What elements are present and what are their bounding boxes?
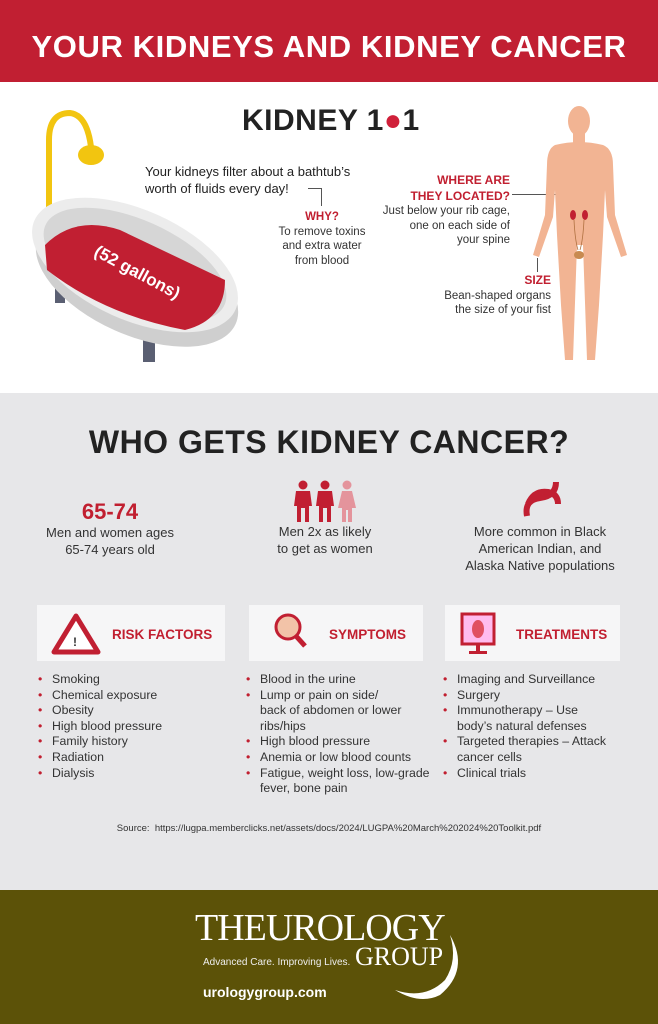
text: where located: WHERE ARE	[437, 173, 510, 187]
list: symptoms: High blood pressure	[260, 734, 370, 748]
stat: populations: More common in Black	[474, 524, 606, 539]
stat: age: Men and women ages	[46, 525, 174, 540]
icon: bathtub	[32, 110, 238, 362]
text: where located: your spine	[457, 234, 510, 246]
icon: magnifier	[274, 614, 307, 648]
footer: Advanced Care. Improving Lives.	[203, 957, 350, 968]
text: bathtub fact: worth of fluids every day!	[145, 181, 289, 196]
title: YOUR KIDNEYS AND KIDNEY CANCER	[31, 29, 626, 64]
list: treatments: Surgery	[457, 688, 500, 702]
text: why: WHY?	[305, 211, 339, 223]
icon: dna	[524, 482, 561, 516]
logo: THEUROLOGY	[195, 907, 445, 949]
text: bathtub fact: Your kidneys filter about a bathtub’s	[145, 164, 350, 179]
stat: populations	[465, 524, 615, 573]
list: symptoms	[246, 672, 430, 795]
panel: treatments	[445, 605, 620, 661]
website: urologygroup.com	[203, 984, 327, 1000]
text: size: the size of your fist	[455, 304, 551, 316]
panel: symptoms	[249, 605, 423, 661]
text: bathtub fact	[145, 164, 350, 196]
icon: warning	[52, 614, 100, 654]
source: Source: https://lugpa.memberclicks.net/assets/docs/2024/LUGPA%20March%202024%20Toolkit.pdf	[117, 823, 541, 834]
kidney 101 heading: KIDNEY 1●1	[242, 104, 420, 137]
text: why: To remove toxins	[279, 226, 365, 238]
list: risk factors: Chemical exposure	[52, 688, 157, 702]
list: treatments: Immunotherapy – Use	[457, 703, 578, 717]
stat: men: Men 2x as likely	[279, 524, 371, 539]
panel: risk factors	[37, 605, 225, 661]
gray section	[0, 393, 658, 890]
stat: age: 65-74 years old	[65, 542, 155, 557]
stat: populations: Alaska Native populations	[465, 558, 615, 573]
text: why: and extra water	[282, 240, 362, 252]
list: symptoms: Lump or pain on side/	[260, 688, 378, 702]
text: size: Bean-shaped organs	[444, 290, 551, 302]
stat: populations: American Indian, and	[479, 541, 601, 556]
stat: age	[46, 499, 174, 557]
list: risk factors: Smoking	[52, 672, 100, 686]
text: why: from blood	[295, 254, 349, 266]
icon: human body	[533, 106, 627, 360]
list: risk factors	[38, 672, 162, 780]
list: symptoms: Anemia or low blood counts	[260, 750, 411, 764]
list: risk factors: High blood pressure	[52, 719, 162, 733]
text: size	[444, 273, 551, 316]
icon: people	[294, 480, 356, 522]
list: risk factors: Family history	[52, 734, 128, 748]
header band	[0, 0, 658, 82]
text: why	[278, 211, 366, 266]
icon: warning: !	[73, 635, 77, 649]
list: treatments: Imaging and Surveillance	[457, 672, 595, 686]
list: treatments: Targeted therapies – Attack cancer cells	[457, 734, 606, 764]
text: where located: one on each side of	[410, 220, 510, 232]
footer: GROUP	[355, 942, 443, 971]
list: symptoms: back of abdomen or lower ribs/hips	[260, 703, 402, 733]
list: treatments	[444, 672, 606, 780]
footer	[0, 890, 658, 1024]
list: treatments: body’s natural defenses	[457, 719, 587, 733]
panel: treatments: TREATMENTS	[516, 627, 607, 642]
heading: who gets kidney cancer: WHO GETS KIDNEY CANCER?	[89, 424, 569, 460]
list: symptoms: Blood in the urine	[260, 672, 356, 686]
text: where located	[383, 173, 510, 246]
text: where located: Just below your rib cage,	[383, 205, 510, 217]
list: symptoms: Fatigue, weight loss, low-grade fever, bone pain	[260, 766, 430, 795]
panel: symptoms: SYMPTOMS	[329, 627, 406, 642]
list: risk factors: Dialysis	[52, 766, 94, 780]
stat: age: 65-74	[82, 499, 138, 524]
list: treatments: Clinical trials	[457, 766, 526, 780]
tub label: (52 gallons)	[91, 242, 183, 303]
list: risk factors: Radiation	[52, 750, 104, 764]
panel: risk factors: RISK FACTORS	[112, 627, 212, 642]
icon: monitor	[460, 612, 496, 654]
list: risk factors: Obesity	[52, 703, 94, 717]
text: where located: THEY LOCATED?	[410, 188, 510, 202]
text: size: SIZE	[524, 273, 551, 287]
stat: men	[277, 524, 373, 556]
stat: men: to get as women	[277, 541, 373, 556]
